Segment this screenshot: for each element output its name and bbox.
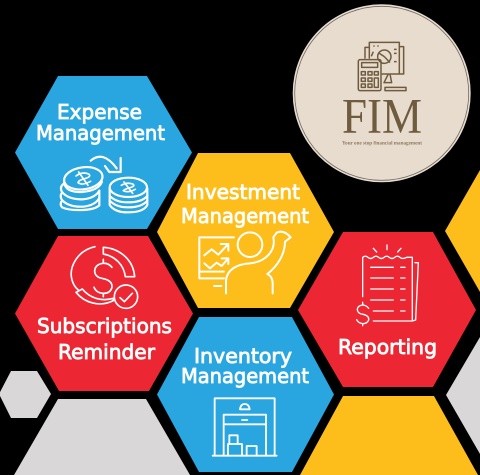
logo tagline: Your one stop financial management	[342, 142, 422, 146]
panel: Investment Management	[157, 153, 334, 308]
heading: Inventory Management	[181, 344, 309, 388]
icon: dollar cycle with check badge	[71, 247, 138, 308]
hexagon: decorative gray small	[0, 371, 51, 418]
heading: Subscriptions Reminder: Subscriptions	[37, 314, 172, 338]
panel: Expense Management	[15, 76, 192, 229]
panel: Inventory Management	[157, 317, 334, 472]
heading: Reporting: Reporting	[338, 335, 437, 359]
hexagon: decorative gray large	[14, 399, 190, 475]
icon: receipt with dollar	[357, 245, 418, 326]
panel: Subscriptions Reminder	[15, 236, 193, 391]
icon: presenter with growth chart	[199, 232, 291, 293]
heading: Expense Management: Expense	[57, 100, 142, 124]
heading: Investment Management	[181, 180, 309, 228]
heading: Inventory Management: Management	[181, 364, 309, 388]
heading: Investment Management: Investment	[186, 180, 300, 204]
heading: Investment Management: Management	[181, 204, 309, 228]
icon: warehouse with boxes	[213, 398, 277, 456]
panel: Reporting	[298, 232, 476, 387]
icon: coins with arrow	[61, 157, 147, 212]
heading: Expense Management	[36, 100, 165, 145]
logo wordmark: FIM	[342, 88, 422, 144]
hexagon: decorative yellow bottom	[300, 396, 478, 475]
logo: FIM circle	[293, 4, 471, 182]
heading: Subscriptions Reminder: Reminder	[58, 340, 156, 364]
hexagon: decorative yellow right	[445, 170, 480, 292]
hexagon: decorative gray right	[446, 337, 480, 454]
heading: Expense Management: Management	[36, 121, 165, 145]
heading: Inventory Management: Inventory	[194, 344, 292, 368]
heading: Subscriptions Reminder	[37, 314, 172, 364]
icon: calculator and monitor	[358, 42, 406, 91]
